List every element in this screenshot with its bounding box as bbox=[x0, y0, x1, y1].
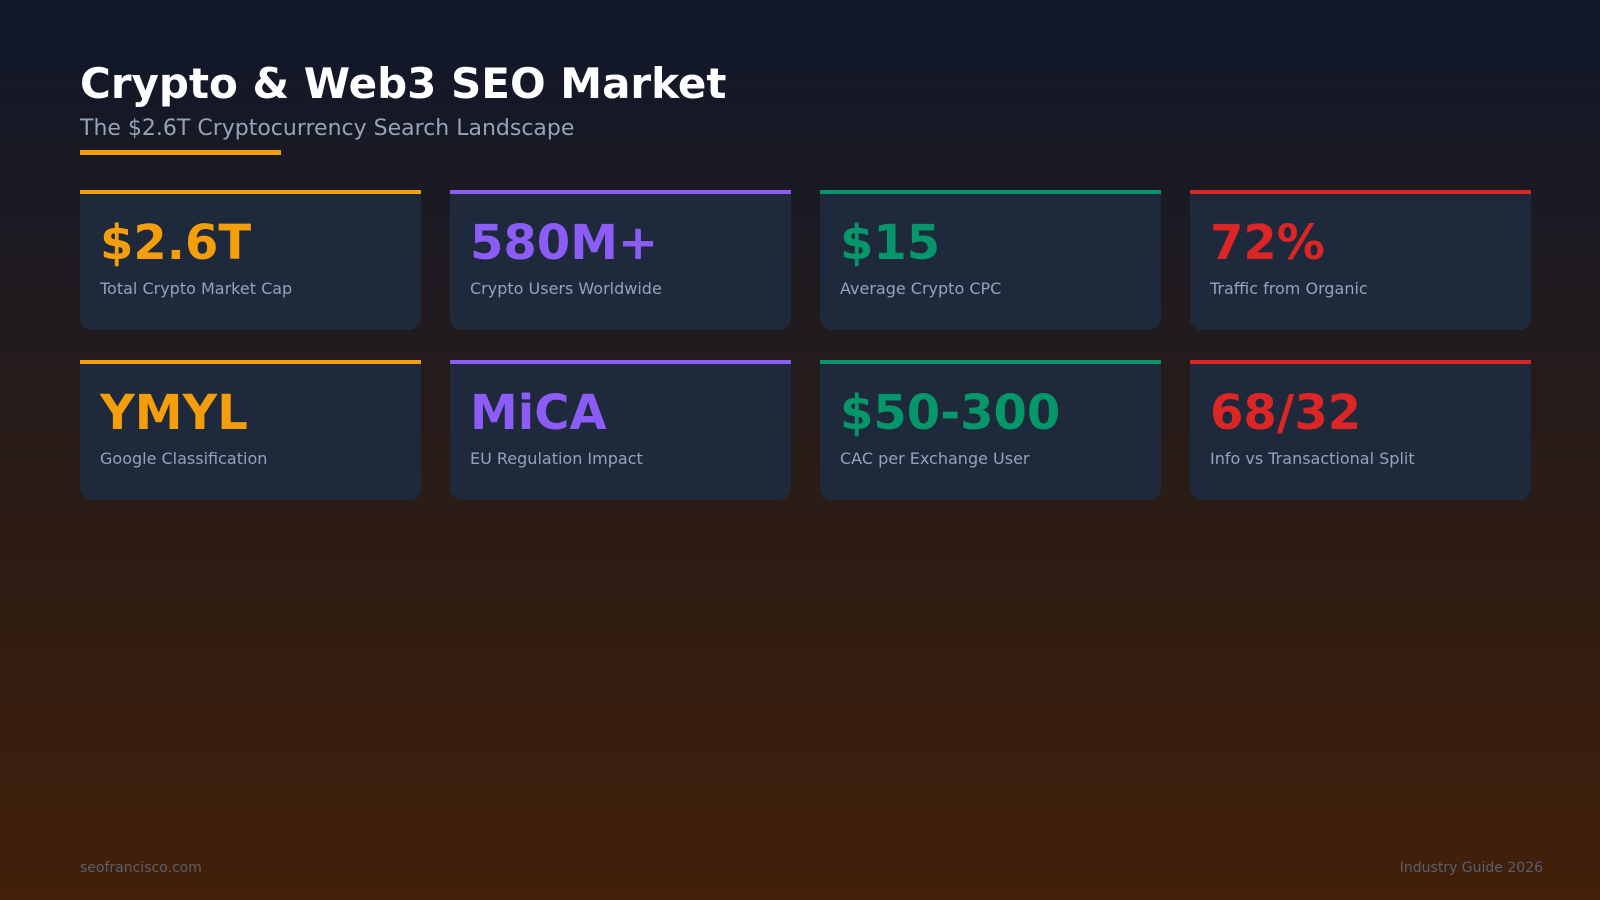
card: mica: MiCA bbox=[470, 385, 607, 441]
card: mica bbox=[450, 360, 791, 500]
accent underline bbox=[80, 150, 281, 155]
card: organic: 72% bbox=[1210, 215, 1325, 271]
footer left: seofrancisco.com bbox=[80, 860, 202, 876]
card: ymyl: Google Classification bbox=[100, 449, 267, 468]
card: cpc bbox=[820, 190, 1161, 330]
card: market cap: Total Crypto Market Cap bbox=[100, 279, 292, 298]
card: organic: Traffic from Organic bbox=[1210, 279, 1368, 298]
card: market cap: $2.6T bbox=[100, 215, 251, 271]
card: users bbox=[450, 190, 791, 330]
card: cpc: $15 bbox=[840, 215, 940, 271]
card: mica: EU Regulation Impact bbox=[470, 449, 643, 468]
card: cac: CAC per Exchange User bbox=[840, 449, 1030, 468]
card: cac: $50-300 bbox=[840, 385, 1060, 441]
card: users: Crypto Users Worldwide bbox=[470, 279, 662, 298]
card: users: 580M+ bbox=[470, 215, 658, 271]
footer right: Industry Guide 2026 bbox=[1400, 860, 1543, 876]
card: market cap bbox=[80, 190, 421, 330]
card: split: Info vs Transactional Split bbox=[1210, 449, 1415, 468]
card: ymyl bbox=[80, 360, 421, 500]
subtitle: The $2.6T Cryptocurrency Search Landscape bbox=[80, 116, 574, 141]
card: cac bbox=[820, 360, 1161, 500]
card: organic bbox=[1190, 190, 1531, 330]
card: cpc: Average Crypto CPC bbox=[840, 279, 1001, 298]
card: split bbox=[1190, 360, 1531, 500]
card: ymyl: YMYL bbox=[100, 385, 248, 441]
title: Crypto & Web3 SEO Market bbox=[80, 59, 726, 108]
card: split: 68/32 bbox=[1210, 385, 1361, 441]
